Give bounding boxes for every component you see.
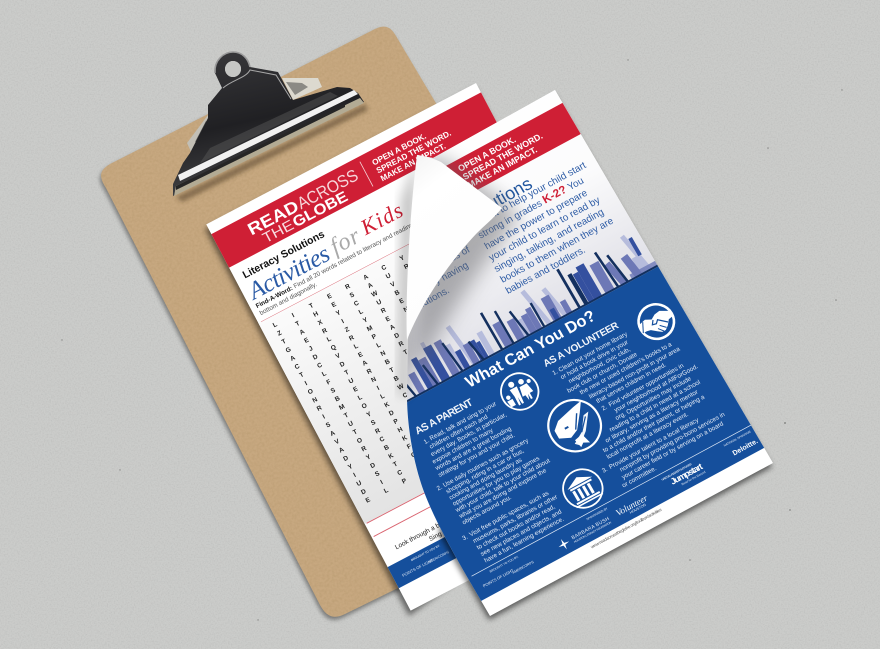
- heading: Literacy Solutions: Literacy Solutions: [241, 229, 327, 281]
- parent list: have a fun, learning experience.: [483, 516, 566, 564]
- intro text K-2: babies and toddlers.: [504, 245, 588, 297]
- heading: Activities for Kids: [252, 206, 402, 300]
- word search grid: RSCLYMPLNBTBWCA: [343, 282, 415, 408]
- volunteer list: your neighborhood at AllForGood.: [613, 363, 700, 414]
- heading: Activities for Kids: for: [326, 223, 365, 260]
- word search grid: THXRLQVDTUELOYSRCBKTCP: [308, 302, 409, 486]
- volunteer list: [552, 332, 725, 488]
- sponsor logos: Deloitte.: [732, 438, 759, 457]
- instructions: bottom and diagonally.: [259, 281, 318, 317]
- volunteer list: 3.: [601, 466, 609, 475]
- red header band: [446, 102, 581, 190]
- heading: As a parent: AS A PARENT: [413, 397, 476, 437]
- instructions: Find all 20 words related to literacy and reading. Words go across, up and down,: [293, 178, 497, 290]
- intro text K-2: singing, talking, and reading: [492, 207, 606, 275]
- parent list: Visit free public spaces, such as: [468, 490, 550, 538]
- volunteer list: reading to a child in need at a school: [608, 379, 702, 434]
- icon: handshake: [637, 303, 676, 340]
- icon: silver side tabs: [187, 78, 322, 154]
- parent list: Use daily routines such as grocery: [442, 437, 531, 489]
- sponsor logos: Jumpstart: [669, 461, 704, 487]
- parent list: Read, talk and sing to your: [429, 401, 498, 442]
- intro text left column: solutions.: [409, 285, 452, 315]
- front sheet shadow: [439, 94, 772, 620]
- sponsor logos: AMERICORPS: [512, 560, 535, 575]
- sponsor logos: SPONSORED BY: [585, 506, 608, 521]
- blue action panel: [407, 264, 764, 601]
- tagline: MAKE AN IMPACT.: [379, 142, 447, 183]
- volunteer list: org. Opportunities may include: [614, 375, 693, 422]
- volunteer list: literacy-based non-profit in your area: [588, 346, 682, 400]
- volunteer list: local nonprofit at a literacy event.: [605, 411, 690, 461]
- volunteer list: or hold a book drive in your: [559, 339, 630, 381]
- shadow cast by the curl: [409, 158, 519, 368]
- icon: family: [500, 372, 540, 411]
- volunteer list: nonprofit by providing pro-bono services in: [619, 411, 727, 474]
- word search grid: AAWUREADRT: [362, 273, 411, 357]
- parent list: with your child, talk to your child about: [454, 457, 552, 514]
- volunteer list: 2.: [601, 404, 609, 412]
- parent list: see new places and objects, and: [479, 508, 563, 558]
- tagline: SPREAD THE WORD.: [461, 131, 544, 182]
- sponsor logos: BROUGHT TO YOU BY:: [489, 555, 519, 574]
- front sheet: parent and volunteer guide: [407, 90, 773, 616]
- sponsor logos: POINTS OF LIGHT: [482, 567, 515, 588]
- heading: Activities for Kids: Kids: [355, 197, 407, 240]
- intro text K-2: Want to help your child start: [475, 160, 588, 228]
- parent list: words and are a great bonding: [433, 425, 513, 473]
- volunteer list: neighborhood, civic club,: [567, 346, 632, 385]
- parent list: shopping, riding in a car or bus,: [445, 447, 526, 495]
- logo: Read Across the Globe: READ: [244, 197, 302, 239]
- parent list: 1.: [423, 437, 431, 446]
- volunteer list: to a child and/or their parent, or helping a: [602, 394, 706, 454]
- tagline: OPEN A BOOK.: [371, 132, 428, 167]
- intro text left column: awareness of: [415, 244, 472, 282]
- callout: You can: You Can Be a Reader: [432, 466, 522, 520]
- callout: You can: Sing or Dance to a favorite book.: [428, 492, 516, 543]
- red header band: ACROSS: [294, 166, 361, 213]
- footer band: [388, 537, 456, 588]
- intro text K-2: have the power to prepare: [483, 188, 590, 252]
- back sheet: Activities for Kids: [202, 83, 497, 618]
- tagline: MAKE AN IMPACT.: [466, 145, 539, 190]
- volunteer list: book club or church. Donate: [566, 351, 639, 395]
- tagline: SPREAD THE WORD.: [375, 129, 453, 175]
- word search grid: EEYIZRLEARNILKDPHKFCTY: [326, 292, 427, 476]
- parent list: 3.: [461, 534, 469, 542]
- word search grid: CUVBEN: [380, 264, 410, 314]
- sponsor logos: HOUSTON LITERACY FOUNDATION: [573, 520, 612, 544]
- shelf of book spines: [407, 234, 658, 396]
- volunteer list: Clean out your home library: [557, 331, 629, 374]
- red header band: THE: [260, 217, 297, 247]
- word search grid: ITAEJDCLFSBMTUTORYDSIL: [289, 311, 390, 495]
- heading: What Can You Do?: What Can You Do?: [462, 307, 599, 391]
- parent list: [424, 402, 564, 562]
- parent list: to check out books and/or read,: [476, 503, 557, 551]
- parent list: objects around you.: [461, 494, 513, 526]
- word search grid: YRF: [399, 254, 415, 279]
- word search grid: [258, 244, 424, 524]
- intro text K-2: strong in grades K-2? You: [476, 175, 586, 241]
- footer band: AMERICORPS: [427, 550, 451, 564]
- parent list: expose children to many: [431, 427, 495, 466]
- parent list: children often each and: [428, 413, 490, 451]
- parent list: every day. Books, in particular,: [430, 411, 508, 458]
- sponsor logos: NATIONAL UNIVERSITY SUPPORTER: [661, 462, 693, 482]
- red header band: [211, 85, 512, 268]
- volunteer list: Find volunteer opportunities in: [608, 362, 685, 408]
- intro text left column: by having: [428, 260, 471, 290]
- volunteer list: the new or used children's books to a: [579, 341, 674, 396]
- callout: You can: [394, 524, 442, 550]
- volunteer list: that serves children in need.: [595, 361, 668, 405]
- sponsor logos: [477, 429, 760, 593]
- intro text left column: [423, 246, 470, 307]
- instructions: Find-A-Word:: [255, 285, 294, 310]
- parent list: strategy for you and your child.: [437, 432, 516, 479]
- sponsor logos: Read for the Record: [681, 470, 707, 486]
- icon: library building: [562, 468, 604, 509]
- callout: You can: Look through a book and tell a story from the pictures.: [394, 472, 537, 551]
- sponsor logos: Volunteer: [614, 493, 650, 518]
- intro text K-2: books to them when they are: [499, 215, 616, 286]
- sponsor logos: BARBARA BUSH: [571, 516, 611, 541]
- parent list: 2.: [436, 484, 444, 492]
- parent list: what you are doing and explore the: [457, 467, 548, 520]
- metal bulldog clip: [173, 52, 368, 202]
- intro text K-2: [478, 162, 613, 294]
- heading: As a volunteer: AS A VOLUNTEER: [542, 320, 621, 370]
- shadow of curl on back sheet: [400, 155, 417, 395]
- volunteer list: Provide your talent to a local literacy: [608, 416, 701, 471]
- volunteer list: or library, serving as a literacy mentor: [604, 389, 699, 444]
- clipboard: [98, 26, 436, 622]
- parent list: cooking and doing laundry as: [448, 457, 523, 502]
- volunteer list: your career field or by serving on a board: [621, 420, 725, 481]
- volunteer list: or committee.: [621, 465, 658, 489]
- footer band: POINTS OF LIGHT: [401, 557, 434, 578]
- sponsor logos: NATIONAL SPONSOR: [723, 429, 752, 448]
- volunteer list: 1.: [551, 368, 560, 377]
- page curl flap: [407, 155, 502, 340]
- red header band: GLOBE: [290, 188, 351, 231]
- sponsor logos: HOUSTON: [629, 503, 647, 515]
- heading: Activities for Kids: Activities: [242, 240, 335, 306]
- intro text K-2: your child to learn to read by: [487, 195, 602, 264]
- website url: www.readacrosstheglobe.org/toolbox/activities: [590, 507, 663, 549]
- tagline: OPEN A BOOK.: [456, 134, 518, 174]
- parent list: museums, parks, libraries or other: [472, 494, 559, 545]
- icon: graduation cap on book: [547, 398, 602, 452]
- word search grid: LZTGACTIONRISAVADYIUDE: [271, 321, 372, 505]
- footer band: BROUGHT TO YOU BY:: [410, 543, 441, 562]
- parent list: opportunities for you to play games: [451, 455, 541, 508]
- heading: Literacy Solutions: Literacy Solutions: [401, 173, 536, 258]
